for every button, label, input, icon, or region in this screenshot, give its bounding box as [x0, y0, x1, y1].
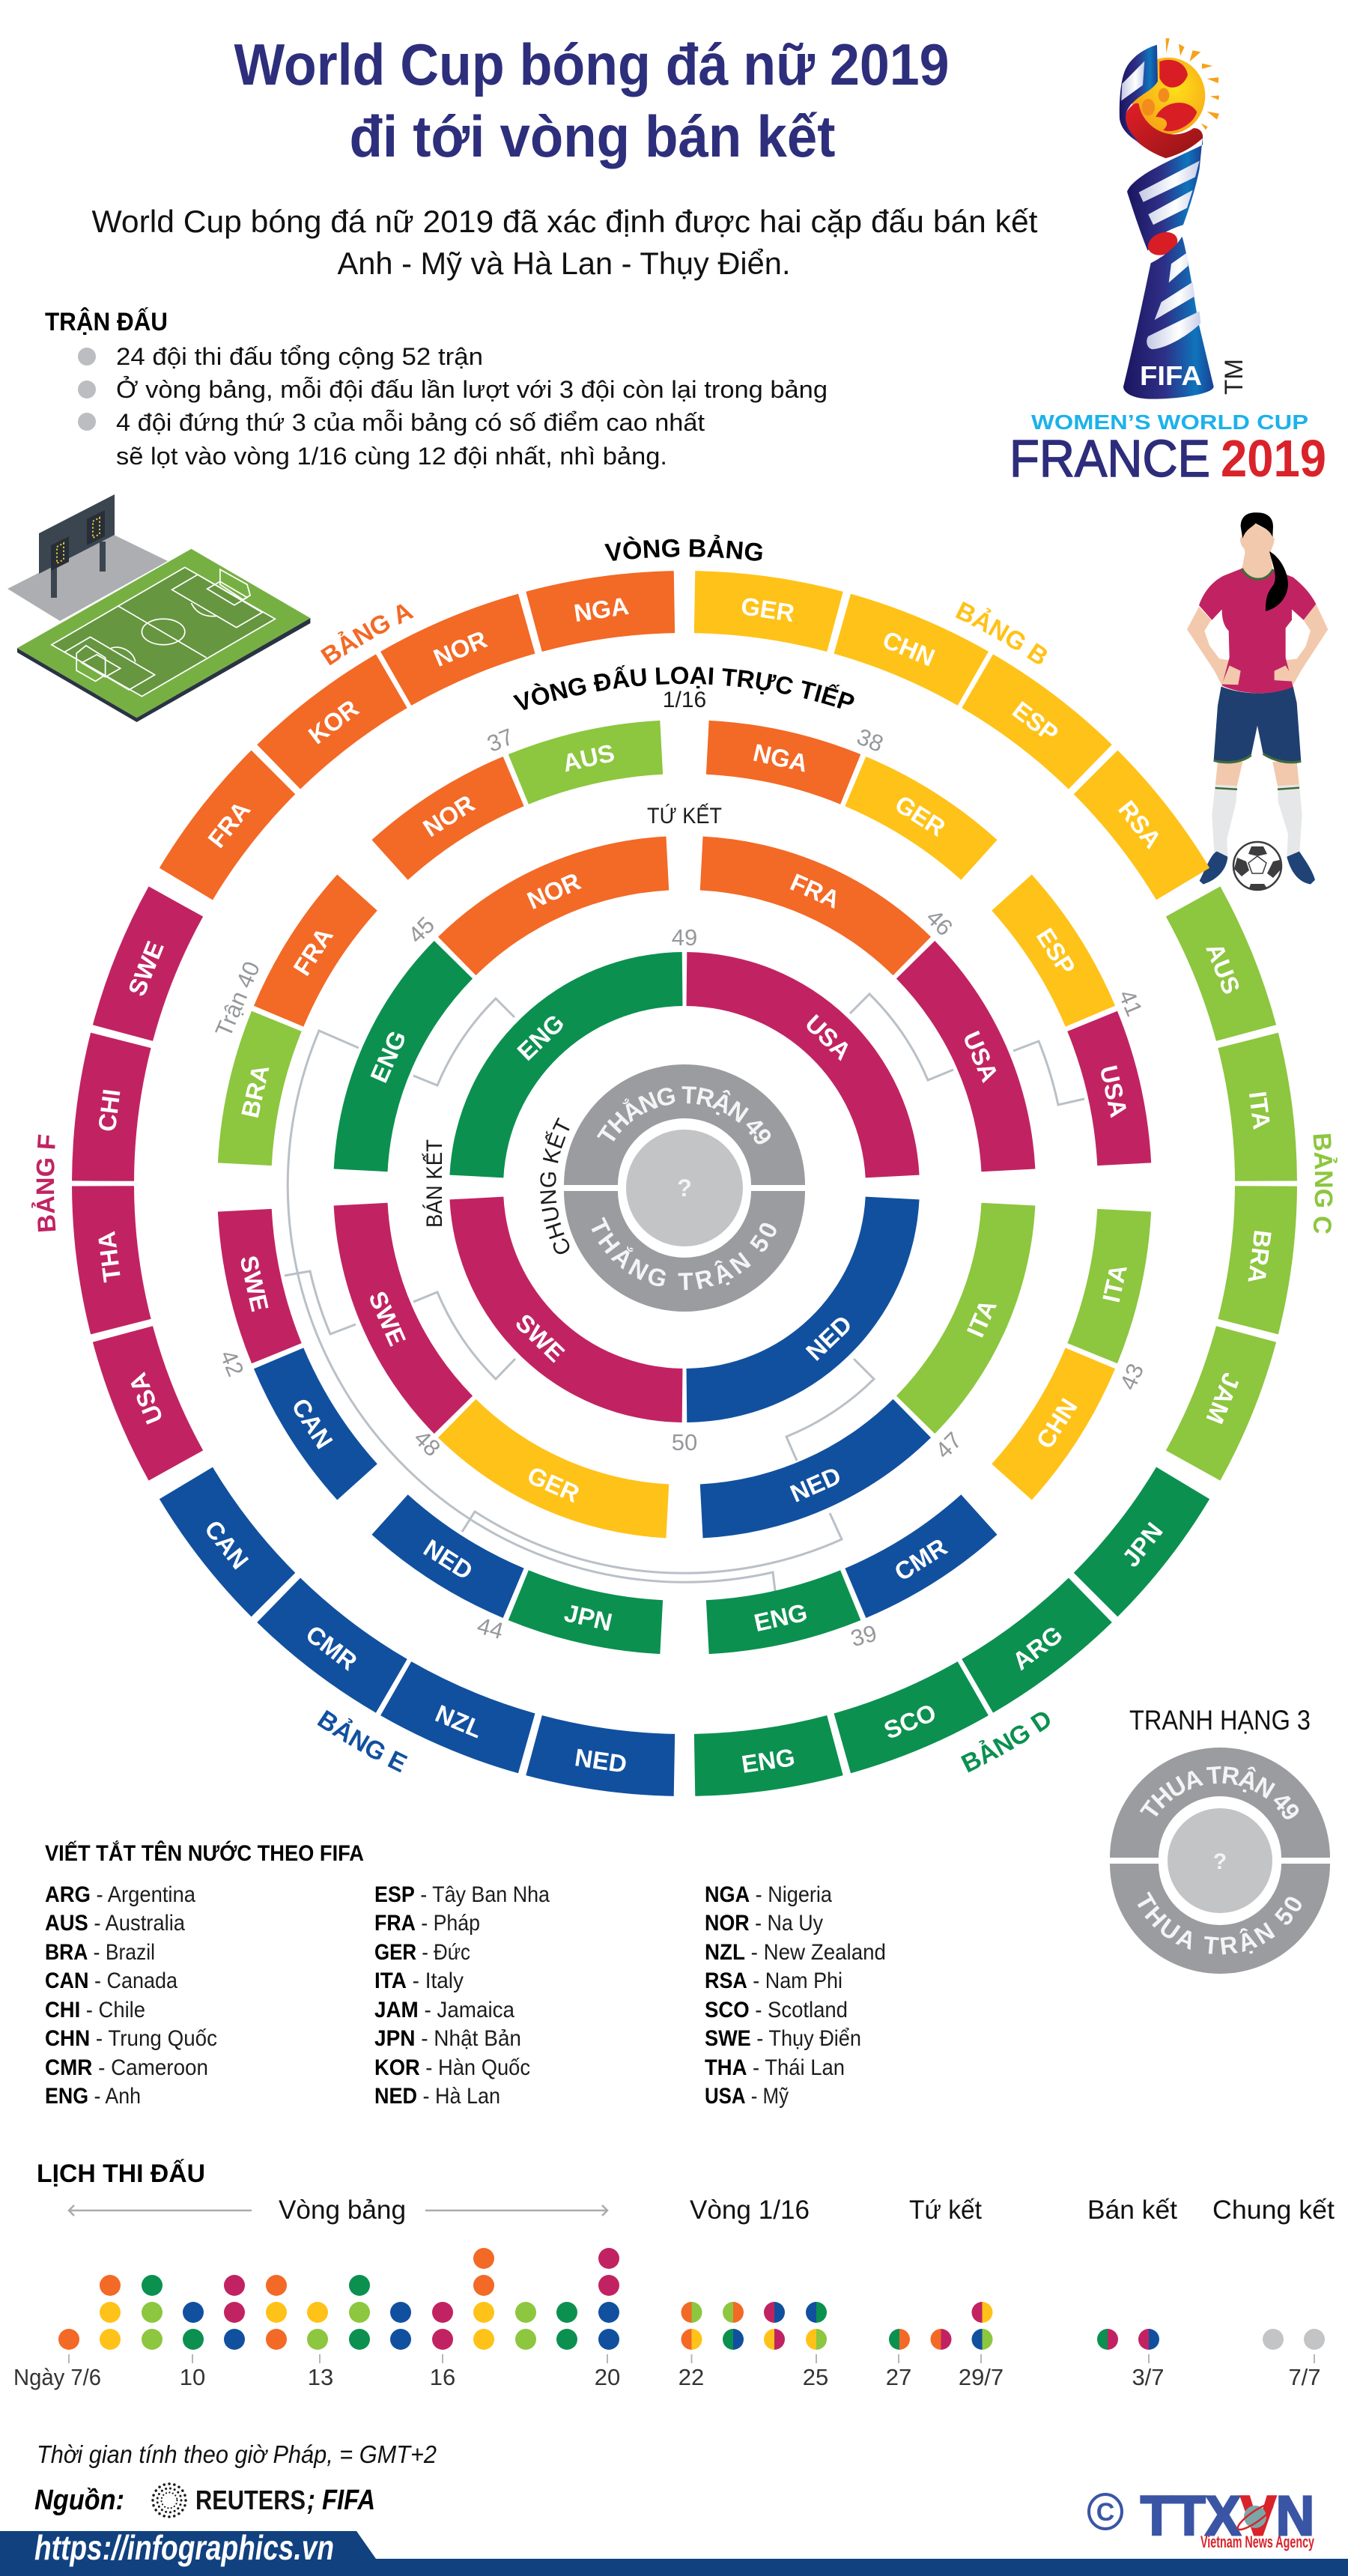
- schedule date ticks and labels: 25: [803, 2364, 828, 2390]
- ring: round of 16: SWE: [234, 1253, 274, 1314]
- group D: JPN: [1117, 1517, 1168, 1572]
- schedule dots: group stage: [58, 2248, 619, 2350]
- legend column 2: ESP - Tây Ban Nha: [374, 1882, 550, 1907]
- match numbers: 37: [484, 724, 517, 757]
- schedule date ticks and labels: 13: [308, 2364, 333, 2390]
- schedule date ticks and labels: 10: [180, 2364, 205, 2390]
- match numbers: 43: [1114, 1360, 1149, 1394]
- match facts bullets: Ở vòng bảng, mỗi đội đấu lần lượt với 3 đội còn lại trong bảng: [116, 376, 828, 403]
- icon: football: [1233, 842, 1281, 890]
- ring: round of 16: FRA: [288, 923, 338, 981]
- ring: quarter-finals: NED: [786, 1461, 845, 1508]
- ring: round of 16: AUS: [560, 739, 617, 777]
- schedule stage headers: Chung kết: [1212, 2195, 1335, 2225]
- ring: round of 16: CAN: [286, 1393, 338, 1453]
- group F: THA: [92, 1230, 126, 1284]
- icon: FIFA trophy logo: [1010, 38, 1326, 488]
- legend: FIFA abbreviations: [45, 1840, 886, 2109]
- intro text: Anh - Mỹ và Hà Lan - Thụy Điển.: [337, 246, 791, 281]
- legend column 3: [705, 1882, 886, 2109]
- group A: FRA: [202, 795, 255, 853]
- match numbers: 49: [672, 924, 697, 951]
- legend column 3: SCO - Scotland: [705, 1998, 848, 2022]
- TTXVN logo: C: [1096, 2498, 1114, 2527]
- ring: round of 16: GER: [890, 790, 950, 842]
- source line: REUTERS: [195, 2485, 306, 2515]
- match numbers: 44: [475, 1612, 506, 1644]
- label: semi-finals: BÁN KẾT: [422, 1139, 447, 1228]
- group A: NGA: [572, 592, 631, 627]
- legend column 3: NOR - Na Uy: [705, 1911, 823, 1936]
- legend column 1: ARG - Argentina: [45, 1882, 195, 1907]
- schedule stage headers: [279, 2195, 1335, 2225]
- ring: round of 16: [194, 697, 1175, 1678]
- ring: round of 16: NOR: [418, 790, 479, 842]
- group C: ITA: [1244, 1090, 1276, 1131]
- schedule date ticks and labels: 29/7: [959, 2364, 1004, 2390]
- footer bar: https://infographics.vn: [34, 2528, 334, 2567]
- group D: [679, 1458, 1209, 1813]
- group F: [54, 882, 217, 1481]
- group A: [160, 554, 690, 909]
- ring: quarter-finals: GER: [523, 1461, 583, 1508]
- match numbers: 39: [848, 1619, 879, 1652]
- ring: round of 16: NGA: [750, 739, 810, 778]
- ring: semi-finals: SWE: [510, 1309, 570, 1367]
- group F: SWE: [123, 937, 169, 1000]
- ring: group stage: [31, 571, 1338, 1813]
- ring: semi-finals: USA: [800, 1009, 857, 1065]
- heading: knockout stage: VÒNG ĐẤU LOẠI TRỰC TIẾP: [512, 665, 854, 710]
- schedule dots: knockout stage: [681, 2302, 1325, 2350]
- icon: stadium pitch and scoreboard: [7, 494, 310, 722]
- label: final: CHUNG KẾT: [540, 1118, 569, 1254]
- third-place heading: TRANH HẠNG 3: [1129, 1705, 1311, 1736]
- label: group B: BẢNG B: [956, 601, 1047, 664]
- schedule stage headers: Vòng bảng: [279, 2195, 406, 2225]
- ring: semi-finals: [447, 941, 922, 1434]
- ring: round of 16: ITA: [1097, 1262, 1132, 1305]
- legend column 3: THA - Thái Lan: [705, 2055, 845, 2080]
- group B: ESP: [1007, 696, 1063, 748]
- legend column 3: NZL - New Zealand: [705, 1940, 886, 1965]
- legend column 1: AUS - Australia: [45, 1911, 185, 1936]
- legend column 2: GER - Đức: [374, 1940, 470, 1965]
- intro text: [91, 204, 1038, 281]
- schedule stage headers: Tứ kết: [909, 2195, 982, 2225]
- title: đi tới vòng bán kết: [349, 103, 836, 169]
- TTXVN logo: TTXVN: [1141, 2485, 1314, 2547]
- ring: round of 16: ENG: [751, 1598, 810, 1637]
- source line: Nguồn:: [34, 2485, 124, 2516]
- chart: tournament bracket rings: [31, 535, 1338, 1974]
- logo France 2019: 2019: [1221, 429, 1326, 488]
- heading: group stage: VÒNG BẢNG: [604, 535, 762, 561]
- ring: quarter-finals: NOR: [523, 867, 585, 915]
- label: round of 16: 1/16: [663, 688, 706, 712]
- icon: female football player: [1187, 512, 1328, 890]
- title: [234, 31, 950, 169]
- label: group E: BẢNG E: [318, 1709, 407, 1772]
- schedule date ticks and labels: Ngày 7/6: [13, 2364, 101, 2390]
- group B: GER: [739, 592, 796, 627]
- label: group A: BẢNG A: [321, 604, 414, 665]
- ring: quarter-finals: FRA: [786, 868, 844, 914]
- time zone note: Thời gian tính theo giờ Pháp, = GMT+2: [37, 2440, 437, 2468]
- group B: RSA: [1113, 795, 1167, 853]
- match numbers: 38: [853, 724, 887, 757]
- schedule date ticks and labels: 20: [595, 2364, 620, 2390]
- match numbers: 50: [672, 1429, 697, 1455]
- legend heading: VIẾT TẮT TÊN NƯỚC THEO FIFA: [45, 1840, 364, 1866]
- match facts bullets: [78, 343, 828, 470]
- match numbers: 47: [930, 1427, 967, 1464]
- group A: KOR: [303, 694, 364, 749]
- final centre circle: ?: [677, 1175, 692, 1201]
- schedule date ticks and labels: [13, 2354, 1321, 2390]
- legend column 3: USA - Mỹ: [705, 2084, 789, 2109]
- third-place circle: THUA TRẬN 49: [1140, 1766, 1299, 1819]
- schedule stage headers: Bán kết: [1087, 2195, 1177, 2225]
- group D: ENG: [740, 1743, 797, 1778]
- ring: quarter-finals: SWE: [363, 1287, 411, 1350]
- schedule date ticks and labels: 7/7: [1288, 2364, 1321, 2390]
- group F: CHI: [93, 1088, 126, 1133]
- legend column 1: CHN - Trung Quốc: [45, 2026, 217, 2051]
- schedule stage headers: Vòng 1/16: [690, 2195, 810, 2225]
- group D: SCO: [880, 1698, 940, 1745]
- legend column 2: [374, 1882, 550, 2109]
- legend column 2: KOR - Hàn Quốc: [374, 2055, 530, 2080]
- group F: USA: [124, 1369, 168, 1428]
- intro text: World Cup bóng đá nữ 2019 đã xác định được hai cặp đấu bán kết: [91, 204, 1038, 239]
- ring: round of 16: ESP: [1031, 923, 1081, 980]
- group B: CHN: [878, 625, 939, 672]
- legend column 2: ITA - Italy: [374, 1969, 464, 1993]
- legend column 1: BRA - Brazil: [45, 1940, 155, 1965]
- match numbers: 42: [215, 1346, 249, 1381]
- group E: CAN: [199, 1515, 254, 1574]
- group B: [693, 571, 1222, 911]
- ring: round of 16: CMR: [890, 1533, 952, 1586]
- group E: [147, 1456, 675, 1796]
- third-place circle: ?: [1213, 1849, 1227, 1874]
- third-place circle: [1110, 1748, 1330, 1974]
- ring: semi-finals: NED: [801, 1310, 857, 1366]
- match facts block: [45, 308, 828, 470]
- group A: NOR: [430, 625, 491, 672]
- final centre circle: [564, 1064, 805, 1312]
- legend column 1: [45, 1882, 217, 2109]
- group E: CMR: [301, 1619, 362, 1676]
- ring: round of 16: USA: [1095, 1063, 1133, 1120]
- group E: NED: [573, 1743, 628, 1778]
- third-place circle: THUA TRẬN 50: [1137, 1891, 1302, 1955]
- ring: round of 16: CHN: [1030, 1393, 1083, 1453]
- match numbers: 45: [403, 912, 440, 948]
- ring: quarter-finals: ITA: [961, 1295, 1002, 1342]
- ring: quarter-finals: ENG: [365, 1026, 412, 1087]
- legend column 2: FRA - Pháp: [374, 1911, 480, 1936]
- source line: [34, 2484, 375, 2517]
- schedule date ticks and labels: 27: [886, 2364, 911, 2390]
- ring: quarter-finals: [271, 774, 1098, 1601]
- ring: round of 16: BRA: [236, 1062, 275, 1121]
- group stage arrows: [69, 2205, 607, 2216]
- ring: round of 16: NED: [419, 1534, 478, 1585]
- legend column 1: CMR - Cameroon: [45, 2055, 208, 2080]
- schedule date ticks and labels: 16: [430, 2364, 455, 2390]
- label: group F: BẢNG F: [31, 1134, 55, 1231]
- ring: semi-finals: ENG: [511, 1009, 570, 1066]
- logo France 2019: FRANCE: [1010, 429, 1210, 488]
- source line: ; FIFA: [307, 2485, 375, 2516]
- match numbers: [210, 724, 1149, 1652]
- title: World Cup bóng đá nữ 2019: [234, 31, 950, 97]
- connector lines: [285, 994, 1084, 1591]
- group C: AUS: [1200, 939, 1245, 998]
- legend column 2: JPN - Nhật Bản: [374, 2026, 521, 2051]
- legend column 1: ENG - Anh: [45, 2084, 141, 2109]
- legend column 3: RSA - Nam Phi: [705, 1969, 842, 1993]
- final centre circle: THẮNG TRẬN 49: [596, 1086, 771, 1145]
- schedule date ticks and labels: 3/7: [1132, 2364, 1165, 2390]
- legend column 3: NGA - Nigeria: [705, 1882, 832, 1907]
- logo FIFA mark: FIFA: [1140, 360, 1202, 391]
- match numbers: 41: [1114, 986, 1148, 1020]
- legend column 2: NED - Hà Lan: [374, 2084, 500, 2109]
- legend column 1: CAN - Canada: [45, 1969, 177, 1993]
- legend column 2: JAM - Jamaica: [374, 1998, 514, 2022]
- group C: [1152, 886, 1315, 1485]
- match numbers: 46: [921, 904, 958, 941]
- ring: quarter-finals: USA: [958, 1027, 1004, 1086]
- match facts bullets: 4 đội đứng thứ 3 của mỗi bảng có số điểm cao nhất: [116, 409, 705, 436]
- group D: ARG: [1007, 1620, 1068, 1676]
- final centre circle: THẮNG TRẬN 50: [592, 1216, 777, 1290]
- match facts heading: TRẬN ĐẤU: [45, 308, 168, 336]
- label: group D: BẢNG D: [960, 1712, 1050, 1772]
- group C: JAM: [1200, 1369, 1245, 1428]
- match facts bullets: 24 đội thi đấu tổng cộng 52 trận: [116, 343, 483, 370]
- label: quarter-finals: TỨ KẾT: [647, 803, 722, 828]
- group C: BRA: [1242, 1228, 1277, 1285]
- match numbers: 48: [409, 1425, 446, 1461]
- logo tagline: WOMEN’S WORLD CUP: [1031, 410, 1308, 434]
- logo trademark: TM: [1220, 359, 1248, 395]
- schedule heading: LỊCH THI ĐẤU: [37, 2160, 205, 2188]
- legend column 3: SWE - Thụy Điển: [705, 2026, 861, 2051]
- logo France 2019: [1010, 429, 1326, 488]
- schedule date ticks and labels: 22: [678, 2364, 704, 2390]
- ring: round of 16: JPN: [562, 1598, 615, 1636]
- icon: Reuters dotted globe: [153, 2484, 186, 2517]
- group E: NZL: [431, 1699, 487, 1743]
- match numbers: Trận 40: [210, 957, 265, 1040]
- label: group C: BẢNG C: [1314, 1134, 1338, 1234]
- match facts bullets: sẽ lọt vào vòng 1/16 cùng 12 đội nhất, nhì bảng.: [116, 443, 667, 470]
- legend column 1: CHI - Chile: [45, 1998, 145, 2022]
- footer bar: [0, 2528, 1348, 2576]
